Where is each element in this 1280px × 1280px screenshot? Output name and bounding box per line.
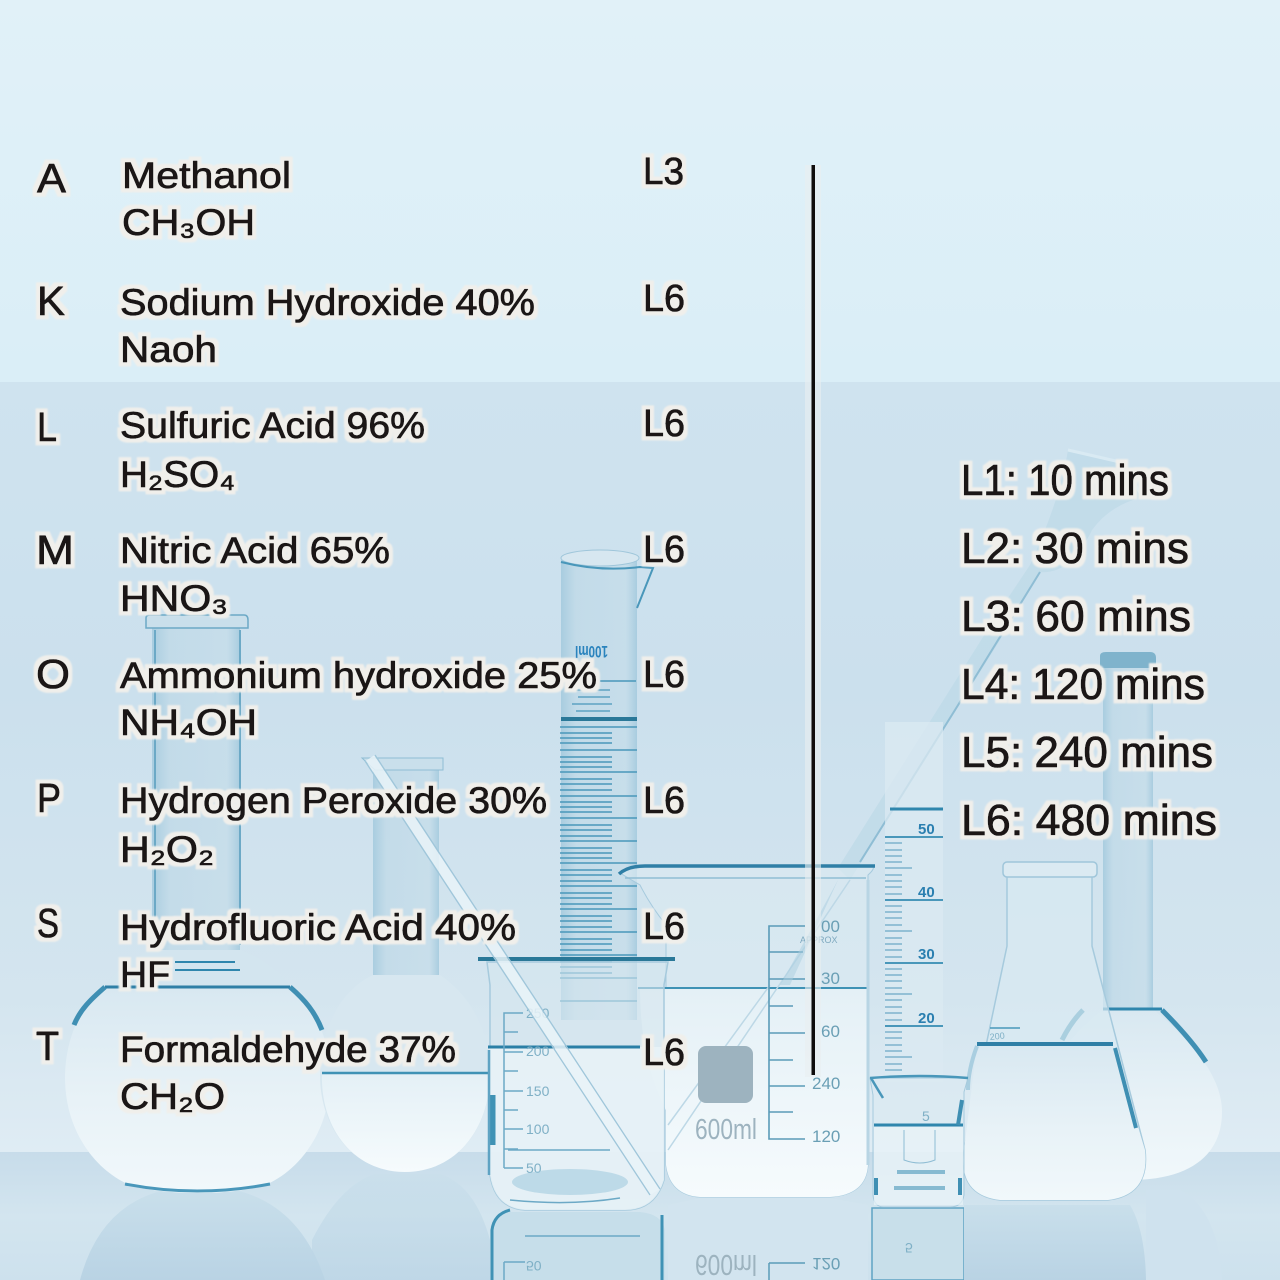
- row: Hydrogen Peroxide: L6: [643, 780, 685, 822]
- legend: level durations: L4: 120 mins: [961, 660, 1205, 709]
- row: Hydrogen Peroxide: H₂O₂: [120, 829, 214, 870]
- illustration: 600ml beaker: 30: [821, 969, 840, 988]
- illustration: 600ml beaker: 600ml: [695, 1114, 757, 1146]
- illustration: 600ml beaker: 60: [821, 1022, 840, 1041]
- legend: level durations: L1: 10 mins: [961, 456, 1169, 505]
- row: Methanol: Methanol: [122, 155, 291, 196]
- row: Ammonium hydroxide: O: [36, 651, 70, 697]
- row: Hydrofluoric Acid: HF: [120, 954, 170, 995]
- row: Sulfuric Acid: L: [37, 404, 57, 450]
- illustration: 250 beaker: 100: [526, 1121, 550, 1137]
- row: Sodium Hydroxide: Sodium Hydroxide 40%: [120, 282, 535, 323]
- legend: level durations: L5: 240 mins: [961, 728, 1213, 777]
- illustration: graduated cylinder right: 40: [918, 884, 935, 901]
- legend: level durations: [961, 456, 1217, 845]
- illustration: erlenmeyer flask: [963, 862, 1146, 1200]
- illustration: 600ml beaker: APPROX: [800, 935, 838, 945]
- row: Hydrofluoric Acid: Hydrofluoric Acid 40%: [120, 907, 516, 948]
- illustration: 600ml beaker: 00: [821, 917, 840, 936]
- illustration: 250 beaker: 200: [526, 1043, 550, 1059]
- illustration: reflections on bench: 120: [812, 1254, 840, 1273]
- row: Nitric Acid: L6: [643, 529, 685, 571]
- illustration: reflections on bench: [80, 1174, 1222, 1280]
- illustration: stirring rod with funnel: [838, 450, 1143, 880]
- row: Sulfuric Acid: Sulfuric Acid 96%: [120, 405, 425, 446]
- row: Nitric Acid: HNO₃: [120, 578, 228, 619]
- illustration: round flask middle: [320, 758, 490, 1172]
- illustration: graduated cylinder right: 50: [918, 821, 935, 838]
- row: Sulfuric Acid: [37, 403, 685, 495]
- row: Nitric Acid: M: [36, 527, 74, 573]
- illustration: reflections on bench: 5: [905, 1240, 913, 1256]
- illustration: 600ml beaker: [619, 866, 875, 1197]
- legend: level durations: L3: 60 mins: [961, 592, 1191, 641]
- illustration: tall graduated cylinder: 100ml: [575, 642, 608, 661]
- row: Hydrogen Peroxide: Hydrogen Peroxide 30%: [120, 780, 547, 821]
- row: Hydrogen Peroxide: P: [37, 775, 61, 821]
- illustration: round flask left: [65, 615, 330, 1193]
- row: Ammonium hydroxide: Ammonium hydroxide 25%: [120, 655, 597, 696]
- row: Hydrofluoric Acid: S: [37, 900, 59, 946]
- row: Formaldehyde: CH₂O: [120, 1076, 225, 1117]
- illustration: small beaker: [870, 1076, 968, 1207]
- row: Formaldehyde: T: [36, 1023, 59, 1069]
- illustration: 600ml beaker: 120: [812, 1127, 840, 1146]
- row: Methanol: [37, 151, 684, 243]
- row: Formaldehyde: L6: [643, 1032, 685, 1074]
- legend: level durations: L2: 30 mins: [961, 524, 1189, 573]
- illustration: erlenmeyer flask: 200: [989, 1030, 1005, 1042]
- row: Formaldehyde: Formaldehyde 37%: [120, 1029, 456, 1070]
- row: Nitric Acid: Nitric Acid 65%: [120, 530, 390, 571]
- illustration: graduated cylinder right: 30: [918, 946, 935, 963]
- chemical list: [36, 151, 685, 1117]
- illustration: 250 beaker: 150: [526, 1083, 550, 1099]
- illustration: reflections on bench: 50: [526, 1258, 542, 1274]
- row: Sodium Hydroxide: [37, 278, 685, 370]
- illustration: tall graduated cylinder: [560, 550, 653, 1020]
- row: Nitric Acid: [36, 527, 685, 619]
- illustration: right round flask: [1040, 652, 1222, 1180]
- illustration: graduated cylinder right: 20: [918, 1010, 935, 1027]
- illustration: 250 beaker: 250: [526, 1005, 550, 1021]
- row: Ammonium hydroxide: L6: [643, 654, 685, 696]
- illustration: reflections on bench: 600ml: [695, 1248, 757, 1280]
- row: Ammonium hydroxide: [36, 651, 685, 743]
- row: Methanol: L3: [643, 151, 684, 193]
- row: Sulfuric Acid: L6: [643, 403, 685, 445]
- illustration: 250 beaker: [478, 959, 675, 1210]
- row: Ammonium hydroxide: NH₄OH: [120, 702, 257, 743]
- row: Methanol: A: [37, 155, 67, 201]
- row: Hydrofluoric Acid: [37, 900, 685, 995]
- row: Sulfuric Acid: H₂SO₄: [120, 454, 235, 495]
- row: Hydrofluoric Acid: L6: [643, 906, 685, 948]
- illustration: small beaker: 5: [922, 1108, 930, 1124]
- row: Sodium Hydroxide: L6: [643, 278, 685, 320]
- row: Hydrogen Peroxide: [37, 775, 685, 870]
- row: Methanol: CH₃OH: [122, 202, 255, 243]
- illustration: graduated cylinder right: [885, 722, 943, 1082]
- illustration: 600ml beaker: 240: [812, 1074, 840, 1093]
- legend: level durations: L6: 480 mins: [961, 796, 1217, 845]
- row: Formaldehyde: [36, 1023, 685, 1117]
- divider: vertical line: [805, 165, 821, 1077]
- illustration: glass rod: [365, 755, 660, 1195]
- row: Sodium Hydroxide: K: [37, 278, 65, 324]
- row: Sodium Hydroxide: Naoh: [120, 329, 217, 370]
- illustration: 250 beaker: 50: [526, 1160, 542, 1176]
